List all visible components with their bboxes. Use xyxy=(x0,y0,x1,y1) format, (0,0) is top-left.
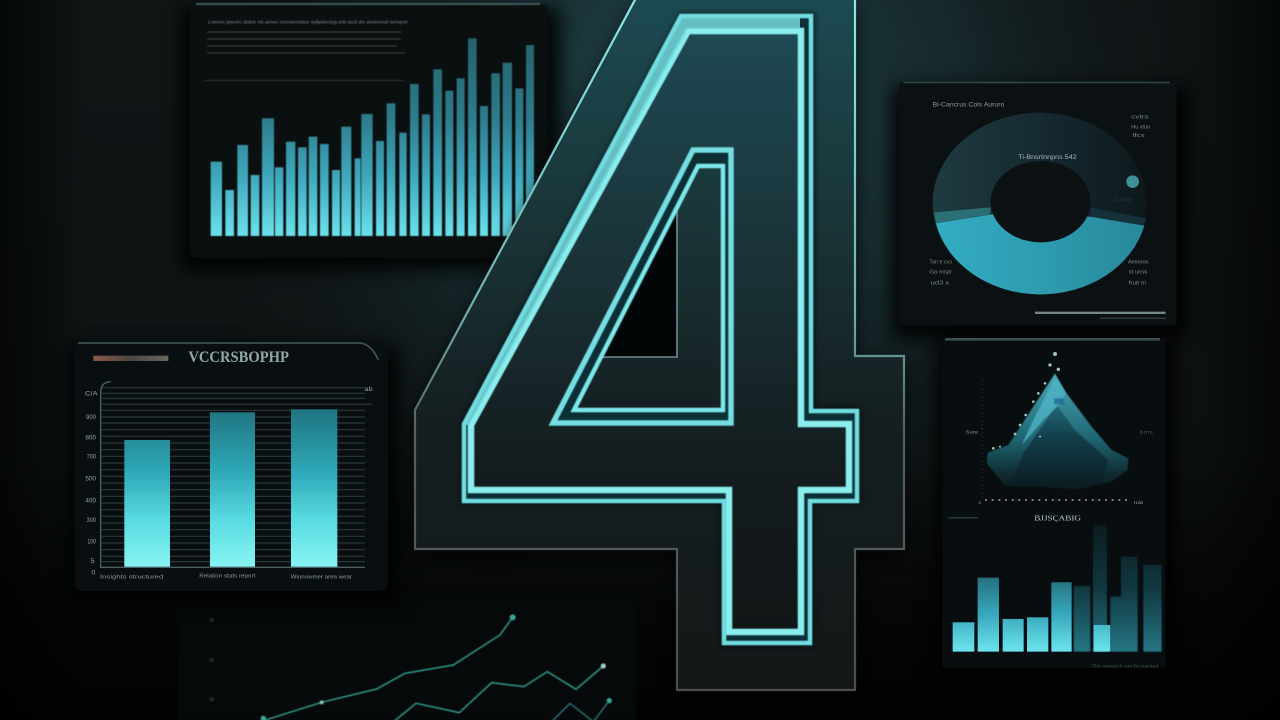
y axis labels: 400 xyxy=(85,498,96,505)
area chart xyxy=(987,352,1128,489)
footer rule xyxy=(1035,312,1166,314)
footer note: The research can be tracked xyxy=(1092,663,1159,668)
y axis labels: 100 xyxy=(87,539,96,546)
side labels: ifcx xyxy=(1133,133,1145,139)
y axis labels: 800 xyxy=(85,434,96,441)
glow band dark shadow xyxy=(459,12,862,649)
counter inner fill xyxy=(574,166,723,410)
data point dots xyxy=(992,352,1060,450)
side labels: Trncin xyxy=(1113,198,1133,204)
side labels xyxy=(929,114,1150,286)
donut label: Ti-Bnsrtnnpns 542 xyxy=(1018,154,1077,161)
grid lines xyxy=(102,388,372,562)
outer glow contour xyxy=(464,16,857,643)
y axis labels: 900 xyxy=(86,414,96,421)
x axis labels: Insights structured xyxy=(100,574,163,580)
x axis labels xyxy=(100,574,352,580)
lower chart heading: BJJSÇABIG xyxy=(1034,514,1082,523)
panel: left bar chart xyxy=(75,343,388,591)
panel: donut chart xyxy=(899,82,1177,326)
side labels: Amnoon xyxy=(1128,260,1149,266)
y axis labels xyxy=(85,386,373,576)
axis labels: o xyxy=(978,500,981,506)
y axis labels: 700 xyxy=(87,453,96,460)
counter black window xyxy=(600,212,677,357)
side labels: Ga mspr xyxy=(929,270,952,276)
numeral outer body xyxy=(415,0,904,690)
side labels: cvtrs xyxy=(1131,114,1149,120)
donut dark segment xyxy=(933,113,1147,294)
axis labels xyxy=(966,429,1154,506)
side labels: fruit m xyxy=(1129,280,1147,286)
counter outer contour xyxy=(553,150,731,423)
bar chart xyxy=(211,38,534,236)
side labels: Hu vtuo xyxy=(1131,124,1150,130)
bars xyxy=(124,409,337,567)
counter inner contour xyxy=(574,166,723,410)
axis labels: nat xyxy=(1134,500,1144,506)
y axis labels: 300 xyxy=(87,517,96,524)
panel: mountain and bar charts xyxy=(942,338,1166,668)
inner face with glow contour xyxy=(471,31,849,632)
panel: top left bar chart xyxy=(190,3,548,258)
axes xyxy=(101,382,365,567)
top band highlight xyxy=(465,16,800,426)
y axis labels: C/A xyxy=(85,391,98,398)
donut hole xyxy=(991,161,1091,242)
donut band xyxy=(934,207,991,223)
side labels: st unsk xyxy=(1129,270,1148,276)
donut bright segment xyxy=(936,214,1144,294)
y axis labels: ab xyxy=(365,386,373,393)
chart title: VCCRSBOPHP xyxy=(188,349,289,366)
counter window edge xyxy=(600,212,677,357)
y axis labels: 5 xyxy=(91,558,95,565)
big numeral 4 xyxy=(415,0,904,696)
x axis labels: Winnowmer area wear xyxy=(291,574,352,580)
y axis labels: 0 xyxy=(91,569,96,576)
line chart lines xyxy=(209,614,612,720)
axis labels: Sure xyxy=(966,429,979,435)
x axis labels: Relation stats report xyxy=(199,574,256,580)
legend swatch xyxy=(93,356,168,361)
y axis labels: 500 xyxy=(85,475,96,482)
dotted axes xyxy=(985,497,1132,502)
axis labels: bms xyxy=(1140,429,1154,435)
marker dot xyxy=(1126,175,1139,188)
panel: bottom line chart xyxy=(178,596,636,720)
side labels: ud3 x xyxy=(931,280,950,286)
numeral shadow xyxy=(415,6,904,696)
panel heading: Bi-Cancrus Cols Aururo xyxy=(933,102,1005,109)
lower bar chart xyxy=(953,525,1162,652)
placeholder heading and text lines: Lorem ipsum dolor sit amet consectetur adipiscing elit sed do eiusmod tempor xyxy=(208,20,409,24)
side labels: Tan tr cvs xyxy=(929,260,952,266)
